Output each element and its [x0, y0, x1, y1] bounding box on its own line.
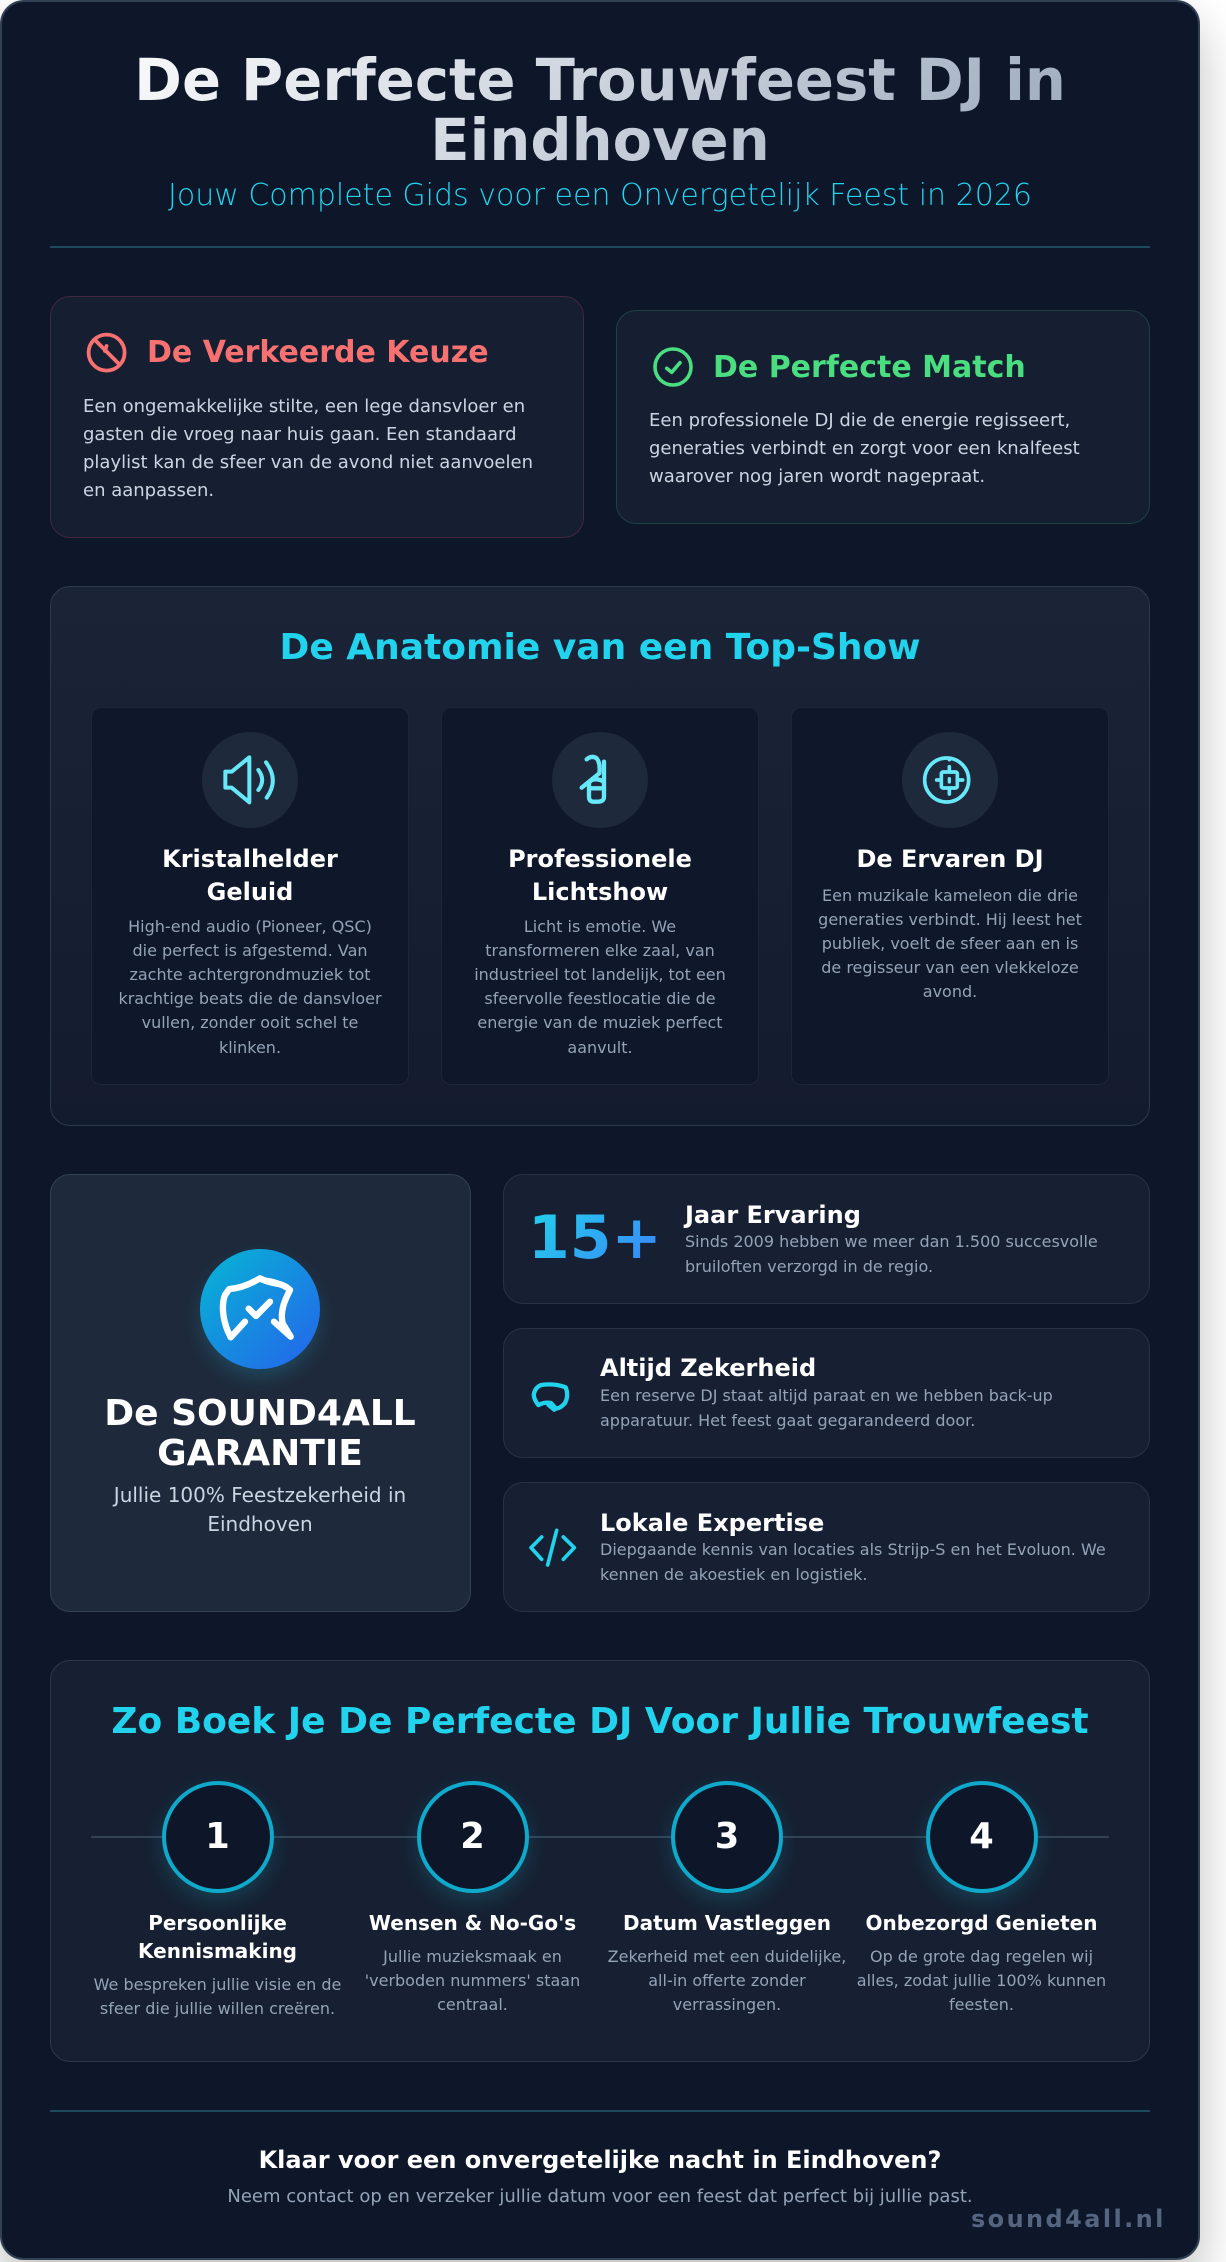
step connector line	[91, 1836, 1109, 1838]
panel: stappen	[50, 1660, 1150, 2062]
title: lokale expertise: Lokale Expertise	[600, 1509, 824, 1537]
title: professionele lichtshow: Lichtshow	[532, 878, 668, 906]
panel: de perfecte match	[616, 310, 1150, 524]
text: altijd zekerheid: apparatuur. Het feest gaat gegarandeerd door.	[600, 1411, 975, 1430]
text: perfecte match: generaties verbindt en zorgt voor een knalfeest	[649, 438, 1080, 459]
text: step 3: all-in offerte zonder	[648, 1970, 806, 1990]
text: step 1: We bespreken jullie visie en de	[94, 1974, 341, 1994]
icon: light	[552, 732, 648, 828]
icon: check	[653, 347, 693, 387]
text: perfecte match: waarover nog jaren wordt nagepraat.	[649, 466, 985, 487]
circle: 1	[162, 1781, 274, 1893]
circle: 2	[416, 1781, 528, 1893]
top divider	[50, 246, 1150, 248]
icon: shield badge	[196, 1249, 324, 1383]
text: step 3	[608, 1946, 846, 2014]
text: verkeerde keuze: en aanpassen.	[83, 480, 214, 501]
icon: backup	[532, 1382, 570, 1412]
icon: target	[902, 732, 998, 828]
title: kristalhelder geluid: Geluid	[207, 878, 293, 906]
text: lokale expertise	[600, 1540, 1106, 1584]
text: professionele lichtshow: aanvult.	[567, 1038, 633, 1057]
card: de ervaren dj	[791, 707, 1109, 1085]
text: step 1	[94, 1974, 341, 2018]
text: step 3: verrassingen.	[673, 1994, 781, 2014]
text: jaar ervaring	[685, 1232, 1098, 1276]
step 1	[94, 1781, 341, 2018]
step 4	[857, 1781, 1106, 2014]
title: step 2: Wensen & No-Go's	[369, 1911, 576, 1935]
card: kristalhelder geluid	[91, 707, 409, 1085]
title: De Perfecte Trouwfeest DJ in	[134, 47, 1066, 114]
watermark: sound4all.nl	[971, 2205, 1166, 2233]
text: garantie: Eindhoven	[207, 1512, 313, 1536]
cta heading: Klaar voor een onvergetelijke nacht in Eindhoven?	[259, 2146, 941, 2174]
step 3	[608, 1781, 846, 2014]
bottom divider	[50, 2110, 1150, 2112]
text: garantie	[112, 1483, 406, 1536]
text: step 4: alles, zodat jullie 100% kunnen	[857, 1970, 1106, 1990]
text: perfecte match	[649, 410, 1080, 487]
text: de ervaren dj	[818, 886, 1082, 1001]
text: jaar ervaring: Sinds 2009 hebben we meer dan 1.500 succesvolle	[685, 1232, 1098, 1251]
heading: garantie: De SOUND4ALL	[104, 1392, 416, 1434]
panel: anatomie	[50, 586, 1150, 1126]
text: professionele lichtshow: energie van de muziek perfect	[477, 1013, 723, 1032]
text: lokale expertise: Diepgaande kennis van locaties als Strijp-S en het Evoluon. We	[600, 1540, 1106, 1559]
heading: stappen: Zo Boek Je De Perfecte DJ Voor Jullie Trouwfeest	[111, 1700, 1089, 1742]
title: professionele lichtshow: Professionele	[508, 845, 692, 873]
text: perfecte match: Een professionele DJ die de energie regisseert,	[649, 410, 1070, 431]
text: kristalhelder geluid: krachtige beats die de dansvloer	[118, 989, 382, 1008]
text: jaar ervaring: bruiloften verzorgd in de regio.	[685, 1257, 933, 1276]
text: verkeerde keuze	[83, 396, 533, 501]
text: garantie: Jullie 100% Feestzekerheid in	[114, 1483, 406, 1507]
text: step 2: Jullie muzieksmaak en	[383, 1946, 562, 1966]
step 2	[365, 1781, 580, 2014]
title: kristalhelder geluid	[162, 845, 338, 906]
title: step 3: Datum Vastleggen	[623, 1911, 831, 1935]
text: step 4: feesten.	[949, 1994, 1014, 2014]
circle: 3	[671, 1781, 783, 1893]
text: step 2: centraal.	[437, 1994, 508, 2014]
text: step 3: Zekerheid met een duidelijke,	[608, 1946, 846, 1966]
text: professionele lichtshow: industrieel tot landelijk, tot een	[474, 965, 726, 984]
panel: de verkeerde keuze	[50, 296, 584, 538]
text: professionele lichtshow	[474, 917, 726, 1057]
text: step 2: 'verboden nummers' staan	[365, 1970, 580, 1990]
text: professionele lichtshow: transformeren elke zaal, van	[485, 941, 715, 960]
title: step 1: Persoonlijke	[148, 1911, 287, 1935]
icon: ban	[86, 332, 126, 372]
text: de ervaren dj: publiek, voelt de sfeer aan en is	[822, 934, 1078, 953]
text: step 4	[857, 1946, 1106, 2014]
text: kristalhelder geluid	[118, 917, 382, 1057]
title: altijd zekerheid: Altijd Zekerheid	[600, 1354, 816, 1382]
title: de ervaren dj: De Ervaren DJ	[856, 845, 1044, 873]
title: step 1: Kennismaking	[138, 1939, 297, 1963]
text: professionele lichtshow: sfeervolle feestlocatie die de	[484, 989, 716, 1008]
title: step 1	[138, 1911, 297, 1963]
icon: speaker	[202, 732, 298, 828]
text: de ervaren dj: Een muzikale kameleon die drie	[822, 886, 1078, 904]
text: step 4: Op de grote dag regelen wij	[870, 1946, 1093, 1966]
title: Eindhoven	[430, 107, 770, 174]
cta text: Neem contact op en verzeker jullie datum voor een feest dat perfect bij jullie past.	[227, 2186, 973, 2207]
heading: de verkeerde keuze: De Verkeerde Keuze	[147, 335, 489, 370]
text: altijd zekerheid: Een reserve DJ staat altijd paraat en we hebben back-up	[600, 1386, 1053, 1405]
text: de ervaren dj: generaties verbindt. Hij leest het	[818, 910, 1082, 929]
circle: 1: 1	[205, 1816, 230, 1857]
heading: garantie	[104, 1392, 416, 1474]
text: kristalhelder geluid: High-end audio (Pioneer, QSC)	[128, 917, 372, 936]
icon: code	[529, 1528, 576, 1567]
title: step 4: Onbezorgd Genieten	[866, 1911, 1097, 1935]
card: professionele lichtshow	[441, 707, 759, 1085]
panel: altijd zekerheid	[503, 1328, 1150, 1458]
circle: 3: 3	[715, 1816, 739, 1857]
text: kristalhelder geluid: die perfect is afgestemd. Van	[132, 941, 368, 960]
title: jaar ervaring: Jaar Ervaring	[685, 1200, 861, 1228]
panel: lokale expertise	[503, 1482, 1150, 1612]
heading: de perfecte match: De Perfecte Match	[713, 350, 1026, 384]
text: verkeerde keuze: playlist kan de sfeer van de avond niet aanvoelen	[83, 452, 533, 473]
subtitle: Jouw Complete Gids voor een Onvergetelijk Feest in 2026	[168, 178, 1032, 213]
text: de ervaren dj: de regisseur van een vlekkeloze	[821, 958, 1079, 977]
title: professionele lichtshow	[508, 845, 692, 906]
text: step 1: sfeer die jullie willen creëren.	[100, 1998, 335, 2018]
text: verkeerde keuze: gasten die vroeg naar huis gaan. Een standaard	[83, 424, 517, 445]
text: altijd zekerheid	[600, 1386, 1053, 1430]
text: kristalhelder geluid: vullen, zonder ooit schel te	[142, 1013, 358, 1032]
text: kristalhelder geluid: klinken.	[219, 1038, 281, 1057]
circle: 4: 4	[969, 1816, 994, 1857]
circle: 2: 2	[460, 1816, 485, 1857]
text: professionele lichtshow: Licht is emotie. We	[524, 917, 676, 936]
panel: garantie	[50, 1174, 471, 1612]
text: lokale expertise: kennen de akoestiek en logistiek.	[600, 1565, 868, 1584]
circle: 4	[926, 1781, 1038, 1893]
heading: anatomie: De Anatomie van een Top-Show	[279, 626, 921, 668]
title	[50, 51, 1150, 171]
panel: jaar ervaring	[503, 1174, 1150, 1304]
heading: garantie: GARANTIE	[157, 1432, 363, 1474]
stat: 15+: 15+	[528, 1203, 662, 1273]
text: kristalhelder geluid: zachte achtergrondmuziek tot	[129, 965, 371, 984]
text: verkeerde keuze: Een ongemakkelijke stilte, een lege dansvloer en	[83, 396, 525, 417]
text: de ervaren dj: avond.	[923, 982, 977, 1001]
title: kristalhelder geluid: Kristalhelder	[162, 845, 338, 873]
text: step 2	[365, 1946, 580, 2014]
